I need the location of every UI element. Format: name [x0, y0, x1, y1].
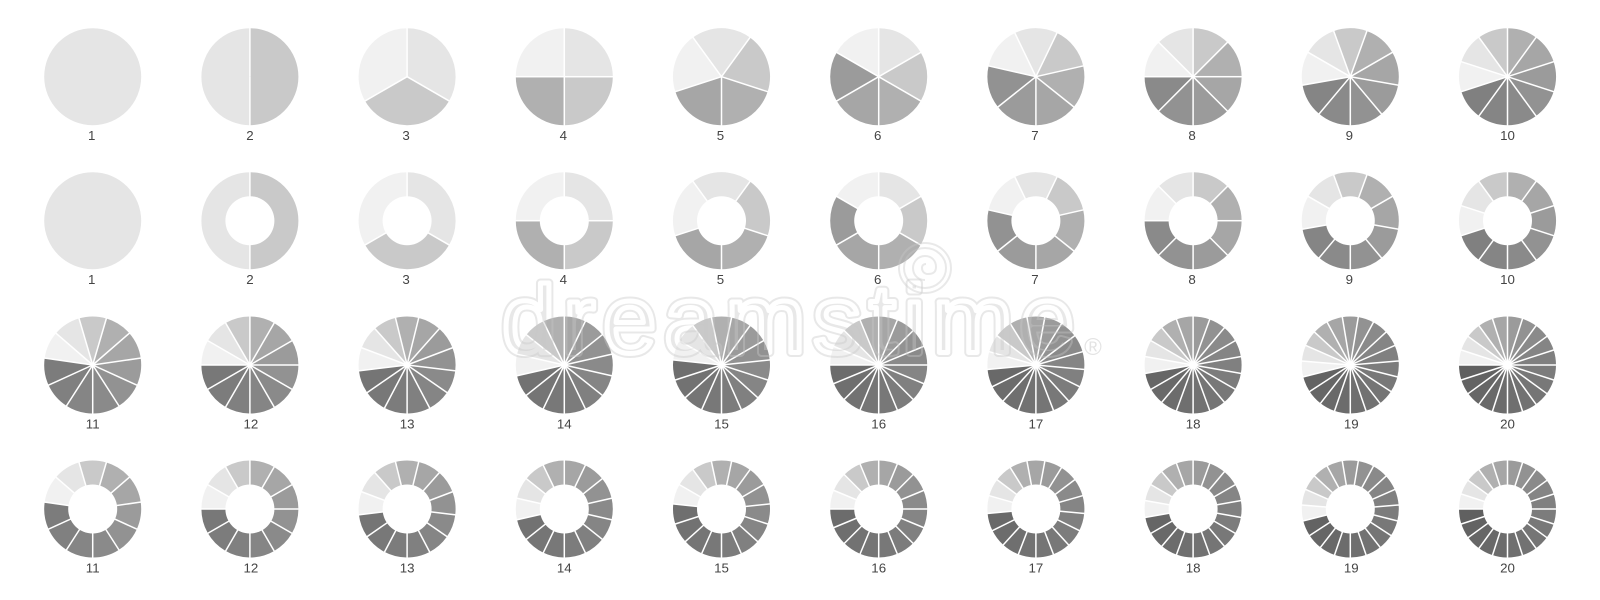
pie 9: 9 — [1346, 128, 1353, 143]
pie 11 — [37, 310, 146, 431]
donut 10: 10 — [1500, 272, 1515, 287]
icon: watermark registered mark: ® — [1084, 334, 1102, 361]
pie 10: 10 — [1500, 128, 1515, 143]
donut 16 — [830, 460, 928, 575]
pie 11: 11 — [86, 416, 100, 431]
donut 12: 12 — [244, 560, 258, 575]
donut 5: 5 — [717, 272, 724, 287]
donut 7 — [977, 163, 1090, 287]
pie 15 — [668, 311, 774, 431]
pie 13 — [353, 311, 460, 431]
pie 17 — [983, 312, 1089, 431]
donut 3: 3 — [402, 272, 410, 287]
pie 18 — [1136, 309, 1250, 431]
pie 4 — [515, 28, 613, 143]
pie 2 — [226, 28, 274, 143]
pie 20 — [1458, 316, 1556, 431]
pie 8 — [1144, 28, 1242, 143]
donut 2: 2 — [246, 272, 254, 287]
pie 15: 15 — [714, 416, 729, 431]
pie 18: 18 — [1186, 416, 1200, 431]
pie 16: 16 — [871, 416, 886, 431]
donut 16: 16 — [871, 560, 886, 575]
pie 10 — [1446, 17, 1569, 143]
donut 13 — [353, 455, 460, 575]
donut 5 — [660, 164, 774, 287]
pie 1: 1 — [88, 128, 95, 143]
pie 2: 2 — [246, 128, 254, 143]
pie 5: 5 — [717, 128, 724, 143]
pie 20: 20 — [1500, 416, 1515, 431]
donut 4: 4 — [560, 272, 567, 287]
pie 19: 19 — [1344, 416, 1359, 431]
pie 13: 13 — [400, 416, 414, 431]
pie 1 — [44, 28, 141, 143]
donut 1 — [44, 172, 141, 287]
pie 8: 8 — [1188, 128, 1196, 143]
donut 19 — [1291, 450, 1409, 575]
donut 17 — [983, 456, 1089, 575]
row 2: donut charts 1 to 10 — [44, 159, 1569, 287]
pie 3: 3 — [402, 128, 410, 143]
donut 6 — [815, 159, 943, 287]
donut 18 — [1136, 453, 1250, 575]
donut 3 — [343, 171, 450, 287]
pie 14: 14 — [557, 416, 572, 431]
pie 9 — [1294, 21, 1404, 143]
row 1: pie charts 1 to 10 — [44, 15, 1569, 143]
pie 7 — [977, 19, 1090, 143]
donut 14: 14 — [557, 560, 572, 575]
pie 12 — [201, 316, 299, 431]
donut 11: 11 — [86, 560, 100, 575]
donut 2 — [225, 172, 274, 287]
donut 8 — [1144, 172, 1242, 287]
pie 6: 6 — [874, 128, 881, 143]
pie 3 — [343, 27, 450, 143]
donut 6: 6 — [874, 272, 881, 287]
row 4: donut charts 11 to 20 — [37, 450, 1556, 575]
donut 15: 15 — [714, 560, 729, 575]
watermark: dreamstime wordmark — [502, 242, 1102, 358]
pie 6 — [815, 15, 943, 143]
donut 1: 1 — [88, 272, 95, 287]
donut 7: 7 — [1031, 272, 1039, 287]
pie 14 — [506, 307, 623, 431]
donut 17: 17 — [1029, 560, 1043, 575]
donut 20: 20 — [1500, 560, 1515, 575]
donut 9 — [1294, 165, 1404, 287]
donut 10 — [1446, 161, 1569, 287]
pie 12: 12 — [244, 416, 258, 431]
pie 4: 4 — [560, 128, 567, 143]
donut 8: 8 — [1188, 272, 1196, 287]
donut 15 — [668, 455, 774, 575]
donut 9: 9 — [1346, 272, 1353, 287]
pie 17: 17 — [1029, 416, 1043, 431]
donut 4 — [515, 172, 613, 287]
pie 7: 7 — [1031, 128, 1039, 143]
donut 11 — [37, 454, 146, 575]
donut 20 — [1458, 460, 1556, 575]
donut 18: 18 — [1186, 560, 1200, 575]
donut 12 — [201, 460, 299, 575]
donut 19: 19 — [1344, 560, 1359, 575]
donut 13: 13 — [400, 560, 414, 575]
donut 14 — [506, 451, 623, 575]
row 3: pie charts 11 to 20 — [37, 306, 1556, 431]
pie 19 — [1291, 306, 1409, 431]
pie 16 — [830, 316, 928, 431]
icon: watermark spiral logo — [899, 243, 951, 293]
pie 5 — [660, 20, 774, 143]
